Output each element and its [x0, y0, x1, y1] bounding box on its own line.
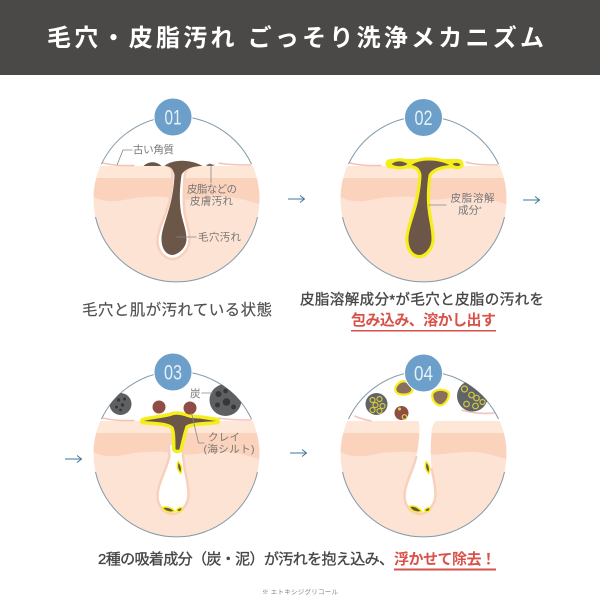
caption: step 02: 皮脂溶解成分*が毛穴と皮脂の汚れを — [300, 292, 544, 308]
badge 03 — [154, 353, 192, 391]
leader lines — [192, 393, 212, 443]
skin cross-section — [340, 421, 506, 537]
skin cross-section — [340, 166, 506, 282]
charcoal left with yellow rings — [366, 393, 388, 415]
badge 01 — [154, 98, 192, 136]
badge 01: 01 — [164, 106, 182, 130]
charcoal particles — [110, 384, 242, 416]
sebum dirt — [144, 161, 214, 255]
panel: step 03 clay and charcoal — [94, 353, 260, 537]
skin cross-section — [94, 421, 260, 537]
arrow 2 to 3 — [523, 196, 540, 204]
leader lines — [117, 150, 214, 237]
label: old keratin: 古い角質 — [133, 143, 174, 156]
label: pore dirt: 毛穴汚れ — [198, 230, 242, 244]
header banner — [0, 0, 600, 75]
keratin strips — [102, 418, 252, 421]
solvent band behind dirt — [386, 159, 464, 168]
old keratin strips — [102, 163, 252, 166]
badge 02 — [404, 98, 442, 136]
arrow into step 3 — [65, 456, 82, 462]
caption: steps 03 and 04 emphasis: 浮かせて除去！ — [394, 550, 496, 568]
label: clay: クレイ — [208, 432, 240, 444]
label: charcoal: 炭 — [190, 387, 201, 400]
clay balls — [152, 400, 196, 414]
label: sebum and skin dirt: 皮脂などの — [187, 182, 237, 196]
leader line — [428, 204, 446, 206]
residual dirt bits — [164, 463, 182, 511]
badge 04: 04 — [414, 362, 433, 386]
badge 04 — [404, 354, 442, 392]
label: ingredient: 成分 — [458, 204, 479, 216]
dirt wrapped in yellow — [144, 415, 216, 450]
clay ball with yellow ring — [394, 406, 408, 420]
circle outline — [96, 117, 258, 282]
keratin strips — [354, 410, 494, 421]
panel: step 02 sebum solvent — [340, 98, 506, 282]
dirt wrapped in yellow solvent — [392, 160, 460, 255]
pore — [158, 165, 198, 259]
caption: steps 03 and 04: 2種の吸着成分（炭・泥）が汚れを抱え込み、 — [98, 551, 394, 568]
label: skin dirt second line: 皮膚汚れ — [190, 194, 234, 208]
empty pore — [404, 419, 442, 514]
label: sea silt: (海シルト) — [204, 442, 254, 456]
caption: step 01: 毛穴と肌が汚れている状態 — [82, 301, 272, 319]
old keratin strips — [350, 162, 498, 166]
panel: step 01 pore dirty — [94, 98, 260, 282]
circle outline — [342, 372, 504, 537]
badge 02: 02 — [414, 107, 432, 130]
label: sebum solvent: 皮脂溶解 — [450, 192, 495, 204]
lifted sebum blobs — [396, 382, 448, 404]
pore edge — [404, 456, 436, 514]
charcoal right with yellow rings — [457, 380, 488, 412]
residual dirt bits — [410, 463, 430, 511]
skin cross-section — [94, 166, 260, 282]
caption: step 02 emphasis: 包み込み、溶かし出す — [351, 311, 496, 329]
circle outline — [96, 372, 258, 537]
arrow 1 to 2 — [288, 196, 304, 202]
panel: step 04 dirt lifted away — [340, 354, 506, 537]
footnote: ※ エトキシジグリコール — [262, 587, 338, 596]
pore — [158, 444, 188, 514]
title: 毛穴・皮脂汚れ ごっそり洗浄メカニズム — [47, 24, 544, 52]
arrow 3 to 4 — [290, 450, 306, 456]
badge 03: 03 — [164, 362, 182, 384]
label: ingredient: * — [479, 206, 482, 214]
circle outline — [342, 117, 504, 282]
